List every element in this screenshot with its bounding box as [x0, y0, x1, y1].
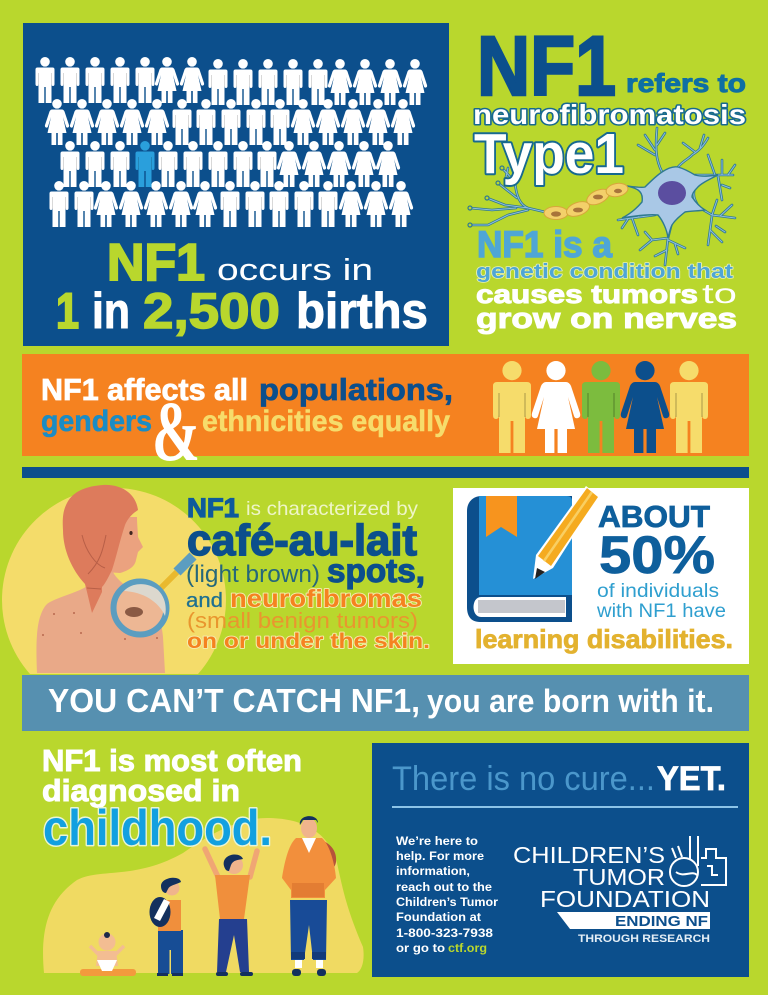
book front cover	[479, 496, 572, 595]
text: NF1 is a genetic condition that causes tumors to grow on nerves: NF1 is a	[477, 224, 612, 265]
text: cafe-au-lait description: on or under the skin.	[187, 629, 430, 653]
lens highlight	[124, 584, 166, 616]
book pages	[474, 597, 566, 617]
text: NF1 affects all populations: NF1 affects all	[41, 372, 248, 407]
text: cafe-au-lait description: is characterized by	[246, 498, 418, 520]
text: contact information	[396, 836, 499, 955]
text: NF1 is most often diagnosed in: NF1 is most often	[42, 743, 302, 778]
text: contact information: ctf.org	[448, 943, 487, 955]
panel: populations band	[22, 354, 749, 479]
woman back and shoulders	[36, 570, 165, 673]
heading: NF1 refers to neurofibromatosis Type1: NF1	[477, 19, 616, 113]
text: NF1 is a genetic condition that causes tumors to grow on nerves: grow on nerves	[476, 303, 737, 335]
stat: about 50%: with NF1 have	[596, 601, 726, 622]
neuron nucleus	[658, 181, 686, 205]
figure: teenager in hoodie	[282, 816, 336, 976]
logo: Children's Tumor Foundation: ENDING NF	[615, 913, 708, 930]
text: contact information: reach out to the	[396, 882, 492, 894]
skin spots	[42, 612, 158, 640]
heading: NF1 occurs in 1 in 2,500 births: 1	[56, 283, 79, 339]
text: contact information: or go to	[396, 943, 445, 955]
heading: there is no cure yet: There is no cure...	[392, 760, 655, 798]
text: NF1 affects all populations	[41, 372, 453, 438]
text: cafe-au-lait description: (light brown)	[186, 561, 320, 588]
heading: NF1 occurs in 1 in 2,500 births: births	[296, 283, 428, 339]
stat: about 50%	[596, 499, 726, 622]
heading: NF1 occurs in 1 in 2,500 births: in	[92, 283, 130, 339]
figure: boy with raised arms	[205, 849, 257, 976]
text: cafe-au-lait description: (small benign tumors)	[187, 608, 418, 633]
section: diagnosed in childhood	[42, 743, 364, 976]
text: cafe-au-lait description: café-au-lait	[187, 516, 417, 565]
woman hair	[63, 485, 138, 613]
heading: NF1 refers to neurofibromatosis Type1	[473, 19, 746, 186]
yellow blob backdrop	[43, 818, 364, 973]
illustration: woman with magnifying glass	[2, 485, 226, 674]
text: NF1 is a genetic condition that causes tumors to grow on nerves: to	[702, 278, 737, 309]
text: contact information: 1-800-323-7938	[396, 928, 494, 940]
pencil	[533, 486, 599, 579]
heading: NF1 refers to neurofibromatosis Type1: neurofibromatosis	[473, 99, 746, 130]
logo: Children's Tumor Foundation: CHILDREN’S	[513, 842, 665, 868]
text: contact information: We’re here to	[396, 836, 478, 848]
logo: Children's Tumor Foundation	[513, 836, 726, 945]
yellow circle backdrop	[2, 488, 226, 674]
text: contact information: Foundation at	[396, 912, 481, 924]
heading: NF1 occurs in 1 in 2,500 births	[56, 234, 428, 339]
divider bar	[22, 467, 749, 478]
neuron terminal buds	[468, 166, 504, 227]
stat: about 50%: of individuals	[597, 581, 719, 602]
illustration: neuron	[468, 128, 735, 265]
text: cafe-au-lait description: NF1	[187, 493, 239, 523]
text: cafe-au-lait description	[186, 493, 430, 653]
text: cafe-au-lait description: spots,	[327, 552, 425, 589]
panel: 1 in 2,500 births	[23, 23, 449, 346]
text: contact information: Children’s Tumor	[396, 897, 499, 909]
text: childhood: childhood.	[43, 800, 272, 856]
figure: baby	[80, 932, 136, 976]
logo tagline ribbon	[557, 912, 710, 929]
logo: Children's Tumor Foundation: THROUGH RESEARCH	[578, 933, 710, 945]
neuron myelin sheath	[544, 182, 629, 220]
text: NF1 is a genetic condition that causes tumors to grow on nerves	[476, 224, 737, 335]
text: learning disabilities: learning disabilities.	[475, 624, 733, 654]
icons: five diverse people	[493, 361, 708, 453]
heading: NF1 occurs in 1 in 2,500 births: 2,500	[143, 283, 280, 339]
magnifier handle	[160, 572, 177, 589]
magnifier lens	[114, 582, 166, 634]
woman eye	[129, 531, 133, 535]
pictogram: crowd of people	[36, 57, 427, 227]
book spine and back cover	[467, 496, 572, 622]
band: you can't catch NF1	[22, 675, 749, 731]
woman face	[106, 517, 143, 573]
text: contact information: help. For more	[396, 851, 484, 863]
text: NF1 is a genetic condition that causes tumors to grow on nerves: causes tumors	[476, 279, 698, 309]
text: NF1 affects all populations: ethnicities equally	[202, 405, 450, 438]
heading: NF1 occurs in 1 in 2,500 births: NF1	[107, 234, 205, 292]
heading: NF1 refers to neurofibromatosis Type1: Type1	[474, 122, 624, 186]
text: cafe-au-lait description: and	[186, 590, 223, 612]
text: NF1 affects all populations: populations,	[259, 372, 453, 407]
stat: about 50%: ABOUT	[598, 499, 710, 534]
panel: no cure yet	[372, 743, 749, 977]
neuron cell body	[622, 167, 718, 238]
heading: NF1 occurs in 1 in 2,500 births: occurs in	[217, 252, 373, 287]
bookmark	[486, 496, 517, 537]
logo: Children's Tumor Foundation: TUMOR	[573, 864, 665, 890]
hair fold lines	[82, 535, 106, 589]
ampersand: &	[152, 383, 200, 479]
text: NF1 affects all populations: genders	[41, 405, 152, 438]
neuron dendrites	[470, 128, 735, 265]
text: NF1 is most often diagnosed in: diagnosed in	[42, 773, 240, 808]
cafe-au-lait spot	[125, 607, 143, 617]
stat: about 50%: 50%	[599, 526, 715, 585]
icon: book with pencil	[467, 486, 599, 622]
panel: learning disabilities	[453, 486, 749, 664]
logo: Children's Tumor Foundation: FOUNDATION	[540, 886, 710, 912]
text: NF1 is a genetic condition that causes tumors to grow on nerves: genetic condition that	[476, 261, 733, 283]
band: you can't catch NF1: you are born with it.	[427, 683, 714, 719]
heading: there is no cure yet: YET.	[657, 760, 726, 798]
text: contact information: information,	[396, 866, 470, 878]
band: you can't catch NF1: YOU CAN’T CATCH NF1,	[48, 682, 420, 719]
figure: child with backpack	[150, 878, 183, 976]
heading: NF1 refers to neurofibromatosis Type1: refers to	[626, 68, 746, 98]
logo icon: lab flasks	[670, 836, 726, 886]
text: cafe-au-lait description: neurofibromas	[230, 585, 422, 613]
text: NF1 is most often diagnosed in	[42, 743, 302, 808]
